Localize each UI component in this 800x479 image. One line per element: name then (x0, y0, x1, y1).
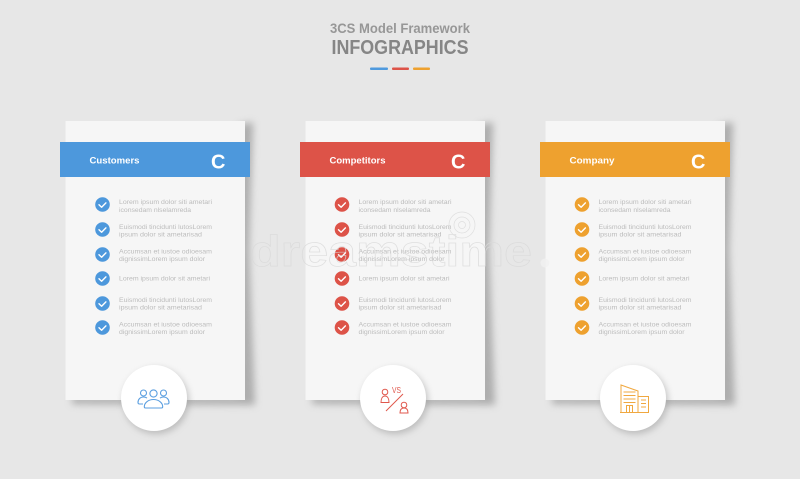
checklist: ipsum dolor sit ametarisad (119, 232, 202, 238)
checklist: Euismodi tincidunti lutosLorem (598, 297, 692, 304)
ribbon header: C (691, 152, 705, 174)
ribbon header (300, 142, 490, 177)
checklist: ipsum dolor sit ametarisad (598, 304, 682, 312)
card (306, 121, 485, 400)
ribbon header: Company (570, 156, 615, 166)
checklist (95, 197, 212, 336)
checklist: dignissimLorem ipsum dolor (358, 329, 445, 336)
ribbon header: Customers (90, 156, 140, 166)
ribbon header: C (451, 152, 465, 174)
icon badge: buildings (600, 365, 668, 434)
card shadow (552, 122, 735, 405)
checklist: dignissimLorem ipsum dolor (598, 256, 685, 263)
checklist: Euismodi tincidunti lutosLorem (358, 224, 452, 231)
icon badge: versus: VS (392, 386, 401, 395)
checklist: Euismodi tincidunti lutosLorem (598, 224, 692, 231)
checklist: iconsedam nlselamreda (598, 207, 671, 214)
checklist: Lorem ipsum dolor sit ametari (358, 276, 450, 282)
ribbon header (60, 142, 250, 177)
checklist: Accumsan et iustoe odioesam (358, 248, 452, 256)
checklist: Accumsan et iustoe odioesam (598, 248, 692, 256)
card shadow (312, 122, 495, 405)
icon badge: people (121, 365, 189, 434)
title block (330, 21, 471, 70)
subtitle: 3CS Model Framework (330, 21, 471, 36)
checklist: Lorem ipsum dolor siti ametari (598, 199, 692, 206)
panel: customers (60, 121, 255, 434)
checklist: Euismodi tincidunti lutosLorem (119, 297, 212, 304)
checklist: Lorem ipsum dolor sit ametari (598, 276, 690, 282)
checklist: Euismodi tincidunti lutosLorem (119, 224, 212, 231)
checklist: Accumsan et iustoe odioesam (119, 248, 212, 256)
heading: INFOGRAPHICS (332, 37, 468, 59)
checklist: dignissimLorem ipsum dolor (358, 256, 445, 263)
card (66, 121, 245, 400)
checklist: iconsedam nlselamreda (119, 207, 191, 214)
checklist: ipsum dolor sit ametarisad (358, 232, 442, 238)
checklist: Accumsan et iustoe odioesam (598, 322, 692, 328)
checklist: ipsum dolor sit ametarisad (119, 304, 202, 312)
checklist: Euismodi tincidunti lutosLorem (358, 297, 452, 304)
checklist: dignissimLorem ipsum dolor (119, 329, 206, 336)
checklist: Lorem ipsum dolor siti ametari (358, 199, 452, 206)
card (546, 121, 725, 400)
checklist: ipsum dolor sit ametarisad (598, 232, 682, 238)
checklist: Accumsan et iustoe odioesam (119, 322, 212, 328)
checklist (575, 197, 692, 336)
watermark (250, 212, 550, 276)
accent dashes (370, 68, 430, 70)
checklist: dignissimLorem ipsum dolor (119, 256, 206, 263)
checklist: iconsedam nlselamreda (358, 207, 431, 214)
checklist: Lorem ipsum dolor sit ametari (119, 276, 210, 282)
ribbon header: Competitors (330, 156, 386, 166)
checklist: Accumsan et iustoe odioesam (358, 322, 452, 328)
panel: competitors (300, 121, 495, 434)
icon badge: versus (360, 365, 428, 434)
ribbon header (540, 142, 730, 177)
card shadow (72, 122, 255, 405)
checklist: dignissimLorem ipsum dolor (598, 329, 685, 336)
checklist (335, 197, 452, 336)
ribbon header: C (211, 152, 225, 174)
checklist: Lorem ipsum dolor siti ametari (119, 199, 212, 206)
watermark: dreamstime (250, 227, 532, 276)
checklist: ipsum dolor sit ametarisad (358, 304, 442, 312)
panel: company (540, 121, 735, 434)
